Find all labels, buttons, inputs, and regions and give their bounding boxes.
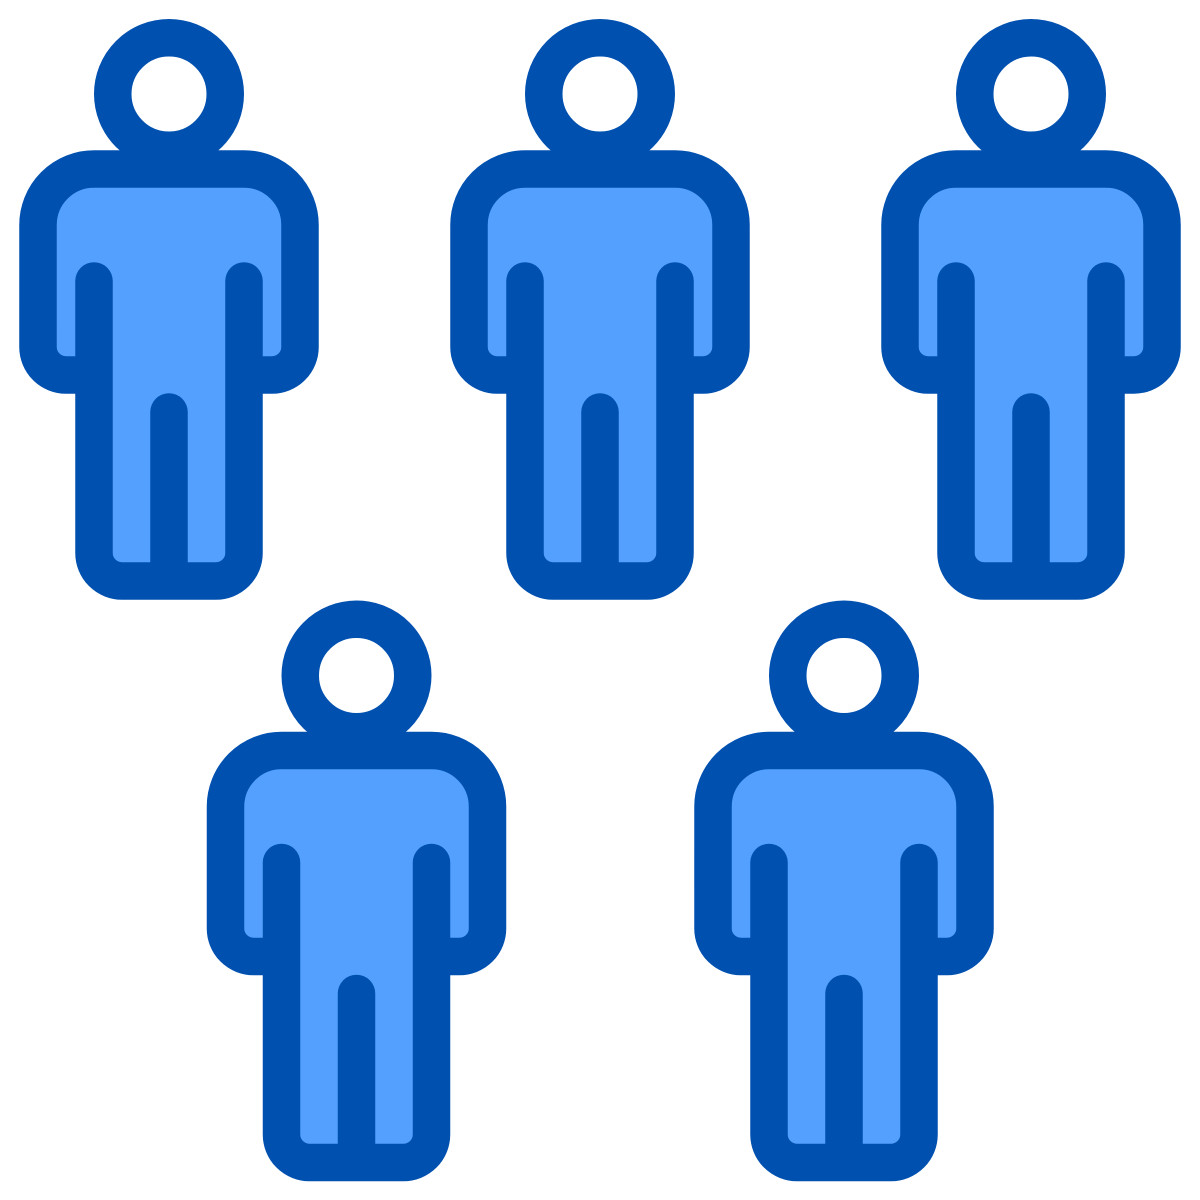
icon: person top center (469, 38, 731, 581)
icon: person top left (38, 38, 300, 581)
icon: person bottom right (713, 619, 975, 1162)
icon: person top right (900, 38, 1162, 581)
icon: person bottom left (226, 619, 488, 1162)
